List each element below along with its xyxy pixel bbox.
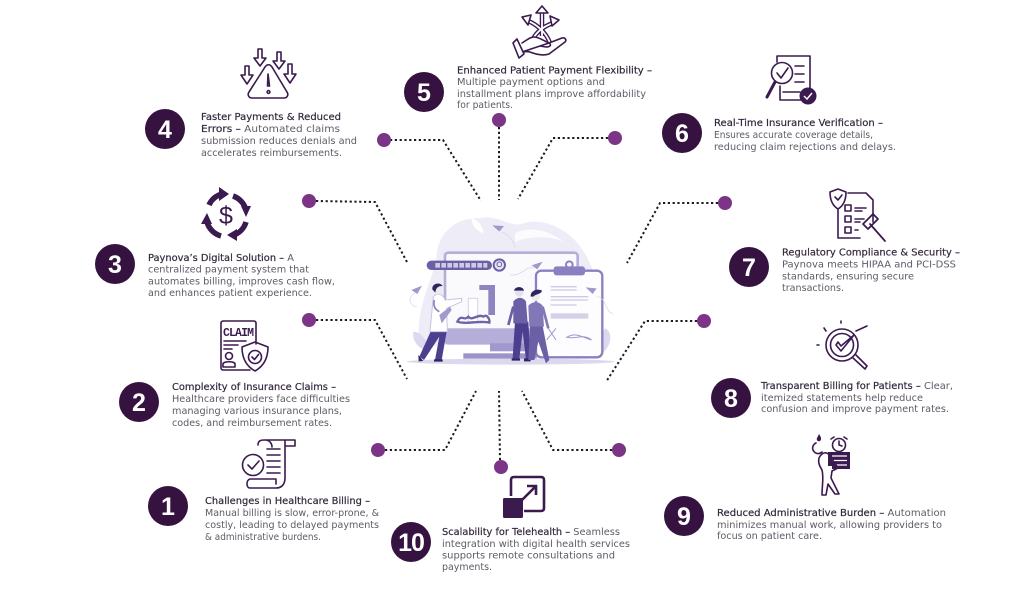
- text block: Manual billing is slow, error-prone, &: [205, 508, 379, 519]
- icon: hand with three arrows: [513, 6, 566, 58]
- text block: integration with digital health services: [442, 539, 630, 550]
- text block: [457, 66, 652, 111]
- panel: item 9 administrative burden: [664, 434, 946, 542]
- doctor: [418, 284, 462, 362]
- number badge 3: 3: [108, 251, 122, 279]
- text block: Reduced Administrative Burden – Automation: [717, 508, 946, 519]
- text block: Healthcare providers face difficulties: [172, 394, 350, 405]
- panel: item 8 transparent billing: [711, 321, 953, 418]
- icon: magnifier with check and rays: [817, 321, 867, 369]
- number badge 10: [391, 522, 431, 562]
- dotted connectors: [316, 127, 718, 460]
- number badge 9: [664, 496, 704, 536]
- central illustration: doctor, patients, monitor and clipboard: [407, 217, 615, 365]
- number badge 2: [119, 382, 159, 422]
- number badge 8: 8: [724, 385, 738, 413]
- number badge 6: [662, 113, 702, 153]
- text block: reducing claim rejections and delays.: [714, 142, 896, 153]
- patient two: [528, 290, 549, 363]
- number badge 7: [729, 247, 769, 287]
- text block: [717, 508, 946, 542]
- text block: Complexity of Insurance Claims –: [172, 382, 336, 393]
- text block: itemized statements help reduce: [761, 393, 923, 404]
- text block: automates billing, improves cash flow,: [148, 276, 335, 288]
- text block: accelerates reimbursements.: [201, 148, 342, 159]
- number badge 7: 7: [742, 254, 756, 282]
- text block: [148, 253, 335, 299]
- paper planes: [411, 225, 597, 294]
- number badge 10: 10: [398, 529, 424, 557]
- text block: supports remote consultations and: [442, 550, 615, 562]
- number badge 4: [145, 109, 185, 149]
- search bar: [427, 259, 505, 271]
- panel: item 3 digital solution: [95, 187, 335, 299]
- icon: claim document with shield: [221, 321, 268, 371]
- text block: submission reduces denials and: [201, 136, 357, 147]
- number badge 6: 6: [675, 120, 689, 148]
- text block: & administrative burdens.: [205, 532, 321, 543]
- icon: claim document with shield: CLAIM: [223, 327, 254, 340]
- clipboard: [536, 261, 602, 357]
- text block: Faster Payments & Reduced: [201, 112, 341, 123]
- text block: Real-Time Insurance Verification –: [714, 118, 883, 129]
- icon: expanding square with arrow: [503, 477, 544, 518]
- text block: minimizes manual work, allowing providers to: [717, 520, 942, 531]
- number badge 5: [404, 72, 444, 112]
- text block: Enhanced Patient Payment Flexibility –: [457, 66, 652, 76]
- panel: item 10 telehealth scalability: [391, 477, 630, 573]
- number badge 9: 9: [677, 503, 691, 531]
- text block: Regulatory Compliance & Security –: [782, 248, 960, 258]
- text block: [205, 496, 379, 543]
- patient one: [508, 287, 531, 361]
- text block: codes, and reimbursement rates.: [172, 418, 332, 429]
- icon: warning triangle with arrows: [241, 49, 296, 98]
- number badge 8: [711, 378, 751, 418]
- text block: transactions.: [782, 283, 844, 294]
- text block: [714, 118, 896, 153]
- text block: installment plans improve affordability: [457, 89, 646, 100]
- number badge 1: [148, 486, 188, 526]
- icon: document, magnifier and check badge: [767, 56, 816, 104]
- panel: item 5 payment flexibility: [404, 6, 652, 112]
- number badge 1: 1: [161, 493, 175, 521]
- text block: Paynova meets HIPAA and PCI-DSS: [782, 260, 956, 270]
- text block: standards, ensuring secure: [782, 272, 914, 282]
- panel: item 7 compliance and security: [729, 189, 960, 294]
- text block: Challenges in Healthcare Billing –: [205, 496, 370, 507]
- panel: item 4 faster payments: [145, 49, 357, 159]
- icon: person carrying files and clock: [813, 434, 850, 495]
- text block: [172, 382, 350, 429]
- connector end dots: [302, 113, 732, 474]
- text block: [201, 112, 357, 159]
- text block: Transparent Billing for Patients – Clear,: [760, 381, 953, 392]
- text block: Ensures accurate coverage details,: [714, 130, 873, 141]
- number badge 2: 2: [132, 389, 146, 417]
- text block: Scalability for Telehealth – Seamless: [442, 527, 620, 538]
- panel: item 2 insurance claims: [119, 321, 350, 429]
- text block: managing various insurance plans,: [172, 406, 342, 417]
- number badge 5: 5: [417, 79, 431, 107]
- text block: [782, 248, 960, 294]
- text block: [442, 527, 630, 573]
- panel: item 1 billing challenges: [148, 440, 379, 543]
- icon: dollar with circular arrows: [201, 187, 251, 241]
- text block: payments.: [442, 562, 492, 573]
- panel: item 6 insurance verification: [662, 56, 896, 153]
- number badge 4: 4: [158, 116, 172, 144]
- icon: checklist, shield and gavel: [830, 189, 885, 241]
- icon: scroll with check: [242, 440, 295, 488]
- text block: centralized payment system that: [148, 264, 309, 276]
- text block: focus on patient care.: [717, 531, 822, 542]
- text block: confusion and improve payment rates.: [761, 404, 949, 415]
- text block: for patients.: [457, 100, 513, 111]
- text block: [760, 381, 953, 415]
- text block: Paynova’s Digital Solution – A: [148, 253, 294, 264]
- text block: and enhances patient experience.: [148, 288, 312, 299]
- number badge 3: [95, 244, 135, 284]
- icon: dollar with circular arrows: $: [219, 202, 233, 230]
- text block: costly, leading to delayed payments: [205, 520, 379, 531]
- text block: Errors – Automated claims: [201, 124, 340, 135]
- text block: Multiple payment options and: [457, 77, 605, 88]
